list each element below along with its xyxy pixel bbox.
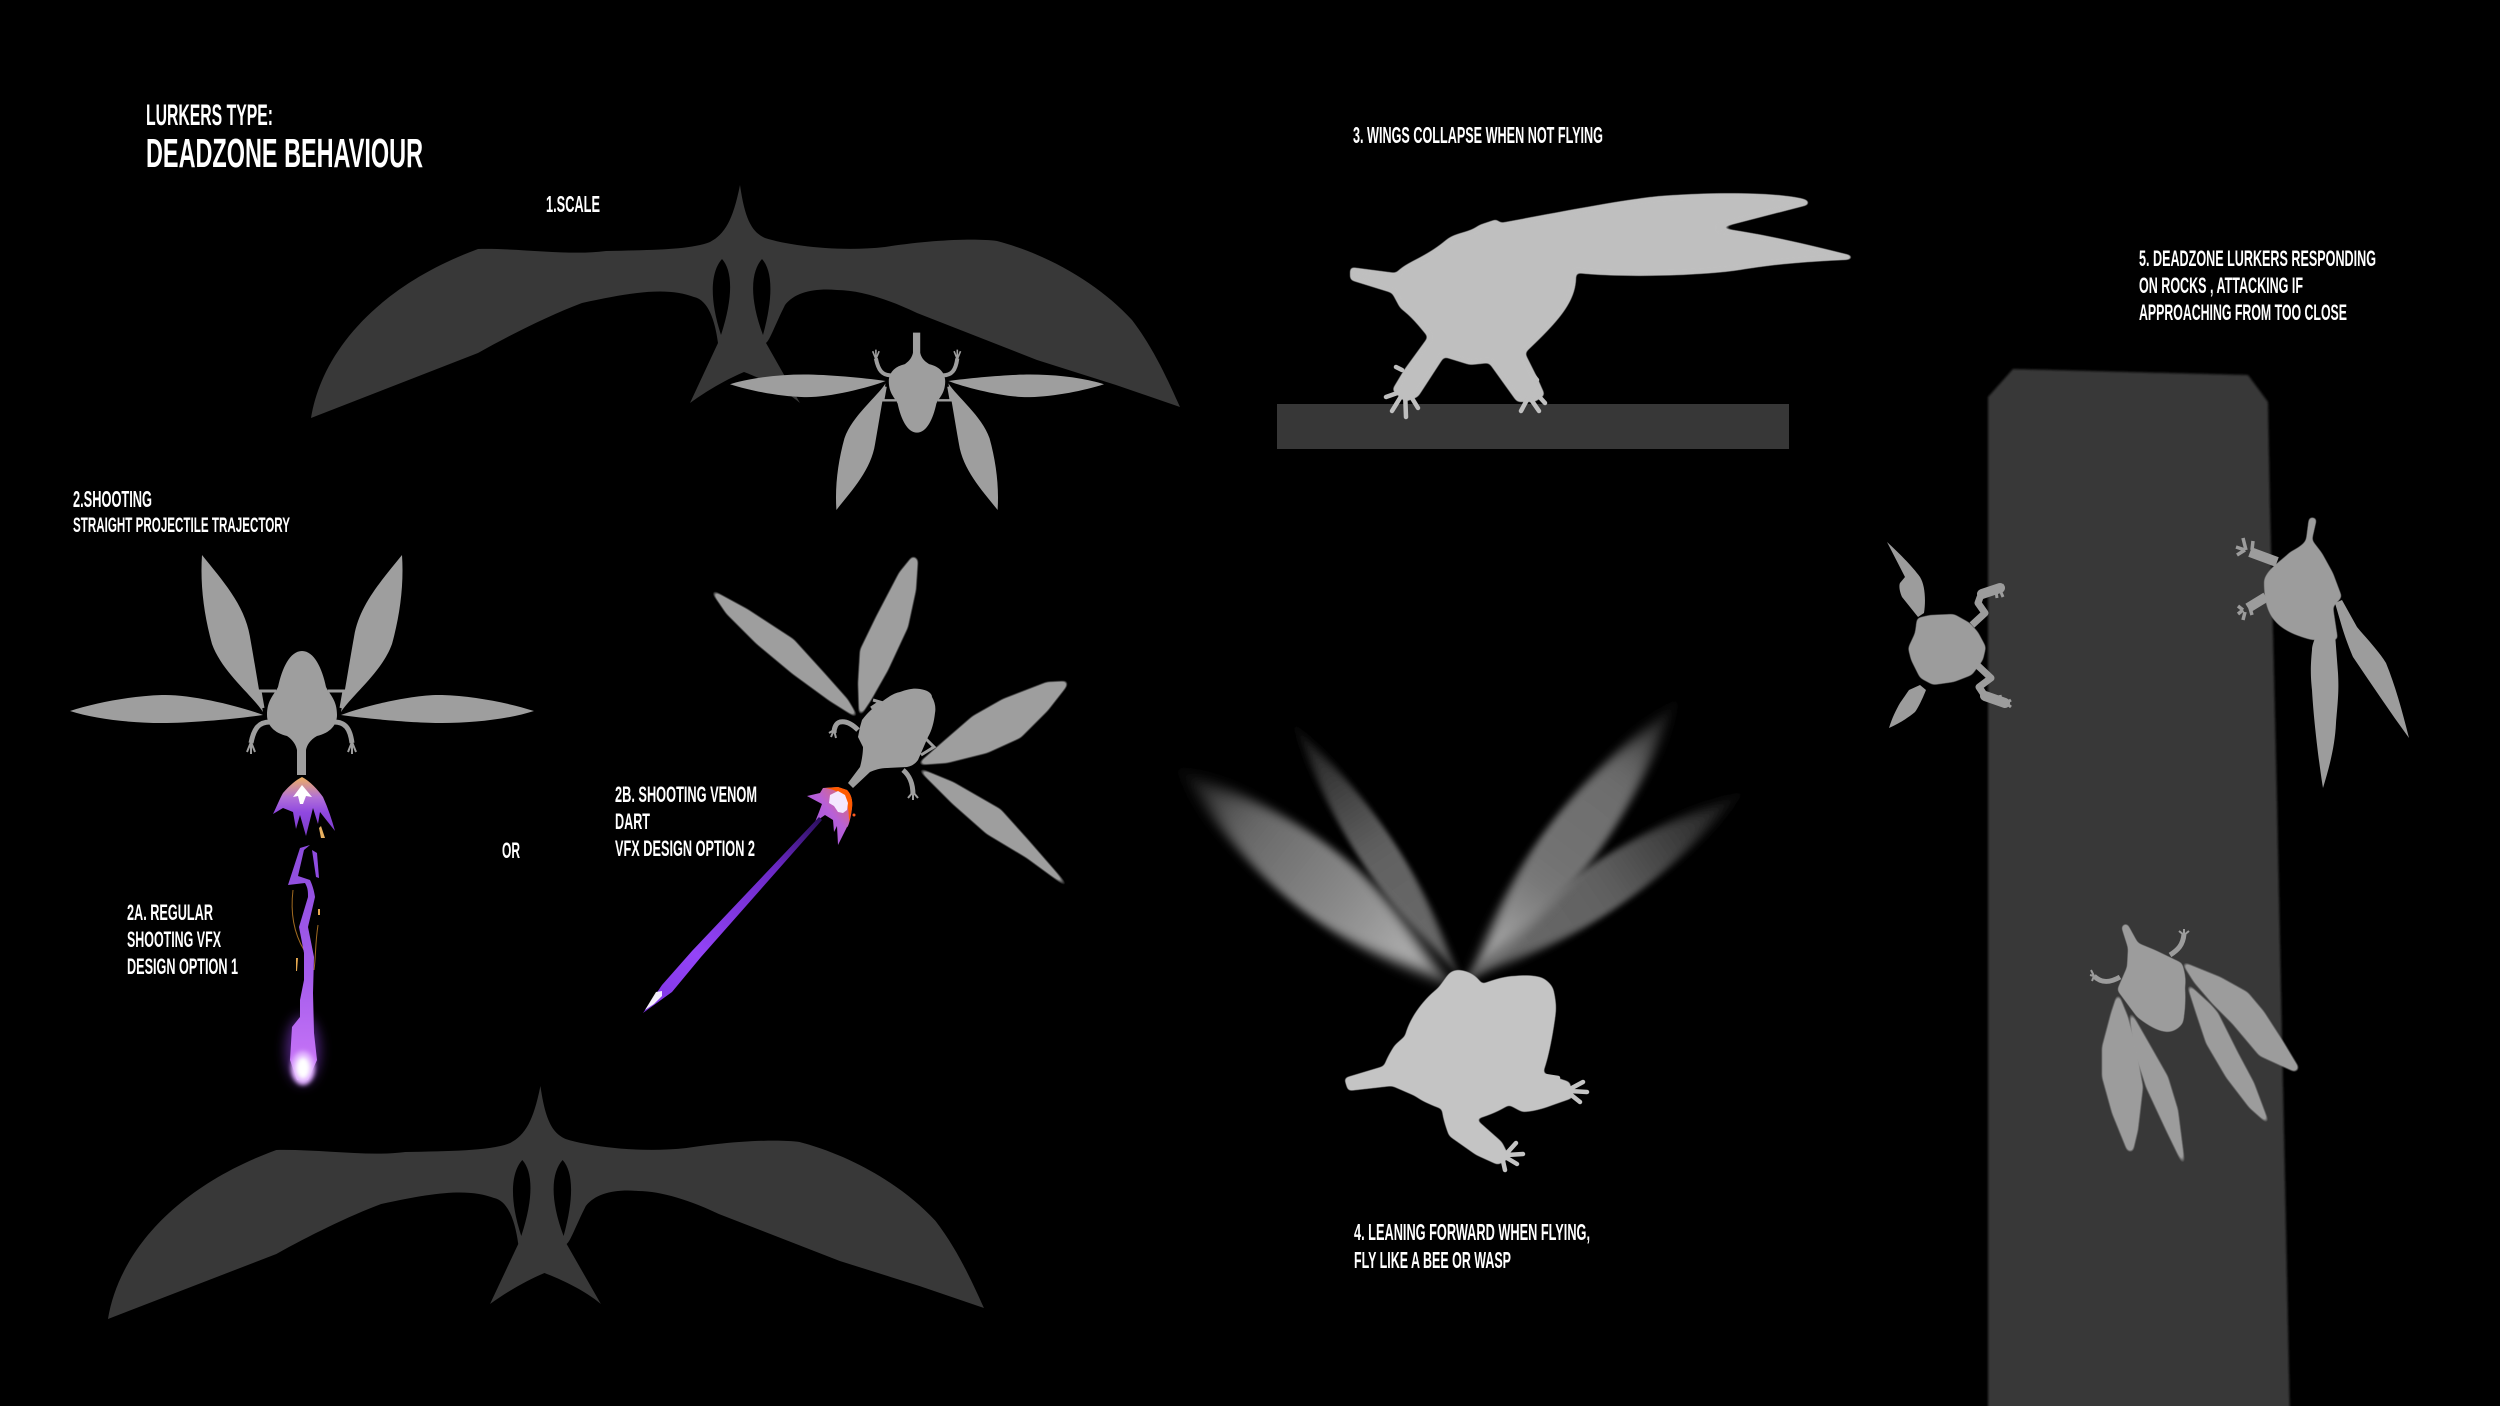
- heading: lurkers type: LURKERS TYPE:: [146, 99, 273, 132]
- lurker in flight: body silhouette: [1344, 970, 1587, 1170]
- lurker shooting diagonally, option 2: [712, 557, 1068, 887]
- VFX option 2: muzzle burst: [807, 787, 856, 845]
- rock pillar: [1988, 369, 2290, 1406]
- VFX option 1: purple bolt with glowing head: [286, 845, 320, 1085]
- label: 4 leaning forward when flying: 4. LEANING FORWARD WHEN FLYING,: [1354, 1219, 1590, 1245]
- label: or: OR: [502, 838, 520, 863]
- label: 5 deadzone lurkers responding on rocks: ON ROCKS , ATTACKING IF: [2139, 273, 2303, 298]
- label: 2A regular shooting vfx design option 1: [127, 900, 238, 979]
- label: 2B shooting venom dart vfx design option 2: VFX DESIGN OPTION 2: [615, 836, 755, 861]
- label: 2 shooting: 2.SHOOTING: [73, 486, 152, 512]
- label: 2A regular shooting vfx design option 1: SHOOTING VFX: [127, 927, 221, 952]
- label: 2B shooting venom dart vfx design option 2: [615, 782, 757, 861]
- wall lurker bottom right, climbing on the rock: [2090, 923, 2298, 1165]
- rock ledge: [1277, 404, 1789, 449]
- label: 5 deadzone lurkers responding on rocks: APPROACHING FROM TOO CLOSE: [2139, 300, 2347, 325]
- small lurker top view, scale comparison: [730, 333, 1104, 510]
- VFX option 1: muzzle burst: [273, 777, 335, 838]
- label: 5 deadzone lurkers responding on rocks: [2139, 246, 2376, 325]
- label: 4 leaning forward when flying: FLY LIKE A BEE OR WASP: [1354, 1247, 1511, 1273]
- label: 2B shooting venom dart vfx design option 2: DART: [615, 809, 650, 834]
- lurker shooting downward, option 1: [70, 555, 534, 775]
- label: 1 scale: 1.SCALE: [546, 191, 600, 217]
- label: 2B shooting venom dart vfx design option 2: 2B. SHOOTING VENOM: [615, 782, 757, 807]
- lurker in flight: blurred wings: [1176, 704, 1738, 1004]
- wall lurker left, seen from behind: [1887, 542, 2011, 728]
- VFX option 2: purple dart beam: [643, 817, 822, 1013]
- label: 2A regular shooting vfx design option 1: DESIGN OPTION 1: [127, 954, 238, 979]
- wall lurker top right, wings folded: [2236, 517, 2409, 788]
- label: 2A regular shooting vfx design option 1: 2A. REGULAR: [127, 900, 213, 925]
- label: 3 wings collapse: 3. WINGS COLLAPSE WHEN NOT FLYING: [1353, 122, 1603, 148]
- large pterosaur silhouette, scale comparison: [311, 185, 1180, 418]
- second pterosaur silhouette, bottom: [108, 1086, 984, 1319]
- title: deadzone behaviour: DEADZONE BEHAVIOUR: [146, 130, 423, 176]
- lurker side view perched with collapsed wings: [1350, 193, 1853, 417]
- label: straight projectile trajectory: STRAIGHT PROJECTILE TRAJECTORY: [73, 514, 290, 537]
- label: 4 leaning forward when flying: [1354, 1219, 1590, 1273]
